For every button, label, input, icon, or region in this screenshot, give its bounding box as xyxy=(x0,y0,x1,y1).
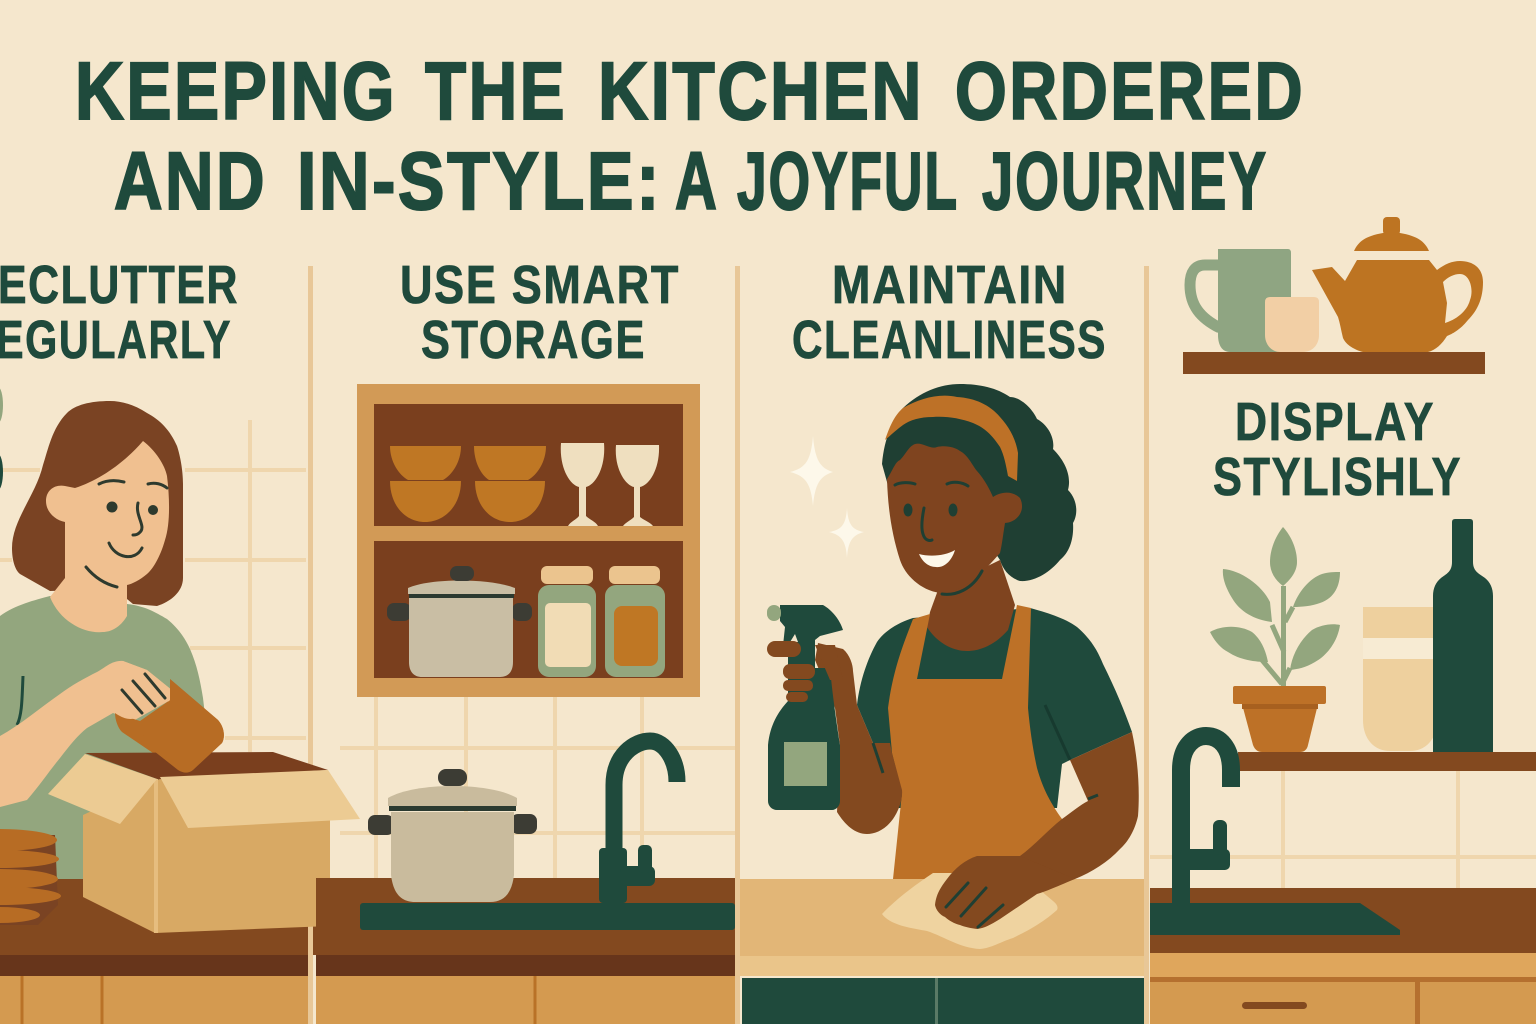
smile xyxy=(919,550,955,567)
sparkles xyxy=(790,436,864,558)
right arm xyxy=(977,732,1139,894)
title: JOYFUL xyxy=(737,136,959,227)
mug xyxy=(1190,249,1319,352)
title: ORDERED xyxy=(955,46,1305,137)
plates stack xyxy=(0,829,61,925)
faucet xyxy=(599,741,677,903)
title: THE xyxy=(425,46,567,137)
headband xyxy=(885,396,1018,481)
neck and face xyxy=(46,441,169,632)
spray bottle xyxy=(767,605,843,810)
panel: use smart storage xyxy=(316,255,735,1024)
counter with sink xyxy=(1150,888,1536,1024)
bottle xyxy=(1433,519,1493,752)
heading: display stylishly: STYLISHLY xyxy=(1213,447,1462,507)
facial features xyxy=(86,481,167,587)
shelf pot xyxy=(387,566,532,677)
panel divider lines xyxy=(308,266,1149,1024)
title: KITCHEN xyxy=(598,46,924,137)
heading: declutter regularly: ECLUTTER xyxy=(0,255,239,315)
heading: maintain cleanliness xyxy=(792,255,1107,370)
plant leaf edge xyxy=(0,387,3,490)
heading: use smart storage xyxy=(400,255,680,370)
title: KEEPING xyxy=(75,46,397,137)
title: JOURNEY xyxy=(982,136,1268,227)
item in hand xyxy=(115,679,224,773)
title xyxy=(75,46,1305,227)
jars xyxy=(538,566,665,677)
counter with sink xyxy=(316,878,735,1024)
wall shelf unit xyxy=(357,384,700,697)
heading: use smart storage: USE SMART xyxy=(400,255,680,315)
hand xyxy=(100,661,173,719)
tile grid lines xyxy=(0,420,1536,888)
faucet xyxy=(1180,736,1231,905)
hair xyxy=(12,401,183,606)
lower shelf xyxy=(1238,752,1536,771)
upper shelf xyxy=(1183,352,1485,374)
counter pot xyxy=(368,769,537,902)
hand on cloth xyxy=(935,856,1075,929)
person: woman with apron xyxy=(815,384,1139,894)
heading: use smart storage: STORAGE xyxy=(421,310,646,370)
facial features xyxy=(895,482,982,594)
heading: maintain cleanliness: MAINTAIN xyxy=(832,255,1068,315)
cardboard box xyxy=(48,679,360,933)
shirt fold line xyxy=(1045,705,1070,760)
hair xyxy=(882,384,1076,581)
neck xyxy=(927,560,1015,651)
heading: declutter regularly: EGULARLY xyxy=(0,310,232,370)
teapot xyxy=(1312,217,1483,352)
panel: maintain cleanliness xyxy=(740,255,1144,1024)
shirt xyxy=(0,596,215,879)
heading: maintain cleanliness: CLEANLINESS xyxy=(792,310,1107,370)
heading: declutter regularly xyxy=(0,255,239,370)
left arm xyxy=(815,643,902,834)
person: woman with box xyxy=(0,401,360,933)
heading: display stylishly xyxy=(1213,392,1462,507)
apron xyxy=(888,605,1075,879)
title: A xyxy=(675,136,719,227)
counter xyxy=(0,879,316,1024)
arm xyxy=(0,661,173,807)
panel: display stylishly xyxy=(1150,217,1536,1024)
potted plant xyxy=(1210,527,1340,752)
heading: display stylishly: DISPLAY xyxy=(1235,392,1435,452)
collar fold line xyxy=(17,676,23,725)
countertop xyxy=(740,879,1144,1024)
face xyxy=(887,444,1022,593)
finger lines xyxy=(122,674,165,713)
title: AND xyxy=(114,136,267,227)
bowls xyxy=(390,446,546,522)
gripping fingers xyxy=(767,641,843,702)
wine glasses xyxy=(561,443,659,526)
shirt xyxy=(857,608,1132,808)
glass canister xyxy=(1363,607,1437,751)
panel: declutter regularly xyxy=(0,217,1536,1024)
title: IN-STYLE: xyxy=(297,136,662,227)
cloth xyxy=(882,873,1058,949)
